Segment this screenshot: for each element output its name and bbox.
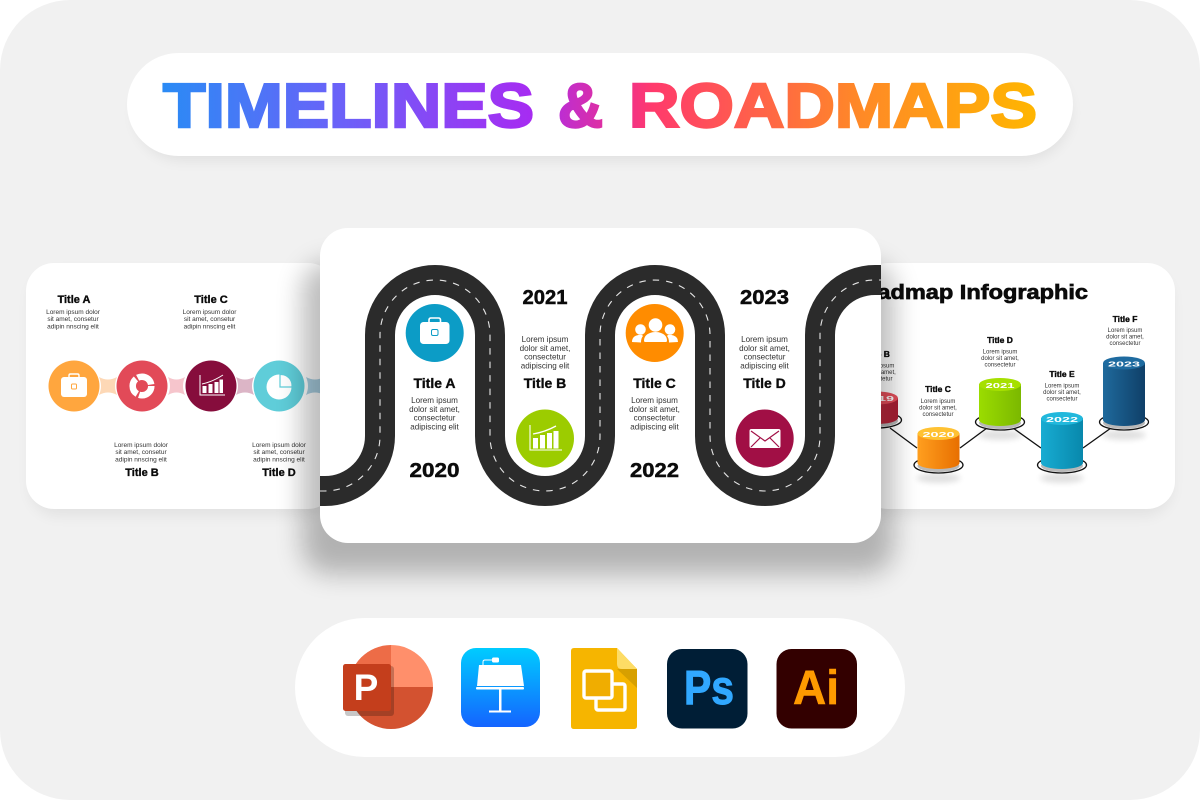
icon: growth chart circle <box>516 410 574 468</box>
label: Title D: Title D <box>987 335 1013 345</box>
cylinder 2019: 2019 <box>862 394 894 403</box>
text: Title A: Lorem ipsum dolor <box>46 309 101 316</box>
text: Title C: dolor sit amet, <box>629 405 680 414</box>
text: Title B: dolor sit amet, <box>520 344 570 353</box>
label: Title E: Lorem ipsum <box>1045 384 1079 390</box>
icon: PowerPoint: P <box>354 667 378 708</box>
year 2022: 2022 <box>630 459 679 482</box>
cylinder 2020: 2020 <box>922 430 954 439</box>
text: Title A: dolor sit amet, <box>409 405 460 414</box>
step D: pie <box>254 360 304 412</box>
icon: Keynote <box>461 648 540 727</box>
card shadow <box>302 262 894 574</box>
label: Title E: dolor sit amet, <box>1043 390 1081 396</box>
text: Title B: sit amet, consetur <box>115 449 167 456</box>
label: Title C: dolor sit amet, <box>919 406 957 412</box>
title banner <box>127 53 1073 160</box>
text: Title C <box>629 375 680 432</box>
text: Title C: Title C <box>194 294 228 306</box>
text: Title C: sit amet, consetur <box>184 316 236 323</box>
cylinder 2019 <box>852 392 902 428</box>
year 2020: 2020 <box>410 459 460 482</box>
label: Title D: consectetur <box>984 362 1016 368</box>
text: Title C: Lorem ipsum dolor <box>183 309 237 316</box>
cylinder 2022: 2022 <box>1046 415 1078 424</box>
text: Title B: Title B <box>524 375 566 391</box>
label: Title F: Lorem ipsum <box>1108 328 1142 334</box>
cylinder 2021 <box>976 378 1024 440</box>
title: & <box>558 72 603 141</box>
text: Title D <box>252 442 307 479</box>
connector lines <box>890 428 1111 448</box>
text: Title A <box>46 294 101 330</box>
road <box>320 280 881 491</box>
text: Title D: adipin nnscing elit <box>253 456 305 464</box>
label: Title B: Title B <box>864 349 890 359</box>
title <box>163 72 1037 141</box>
label: Title B: consectetur <box>861 376 893 382</box>
text: Title D: adipiscing elit <box>740 362 790 370</box>
label: Title B: dolor sit amet, <box>858 370 896 376</box>
text: Title A: Title A <box>57 294 91 306</box>
text: Title A: Lorem ipsum <box>411 396 458 405</box>
cylinder 2020 <box>914 427 963 483</box>
label: Title D: Lorem ipsum <box>983 350 1017 356</box>
text: Title B: Lorem ipsum <box>522 335 569 344</box>
text: Title A: adipin nnscing elit <box>47 324 99 330</box>
label: Title F: consectetur <box>1109 341 1141 347</box>
text: Title D: consectetur <box>744 352 786 362</box>
text: Title A: adipiscing elit <box>410 422 460 432</box>
panel: right cylinder roadmap slide <box>846 263 1175 516</box>
text: Title D: Lorem ipsum dolor <box>252 442 307 449</box>
icon: Illustrator: Ai <box>793 662 839 715</box>
text: Title A: consectetur <box>414 414 456 422</box>
panel: software icons <box>295 618 905 757</box>
text: Title B: consectetur <box>524 352 566 362</box>
text: Title B: Title B <box>125 467 159 479</box>
text: Title D: Title D <box>262 467 296 479</box>
slide heading: Roadmap Infographic <box>846 282 1088 304</box>
cylinder 2023 <box>1100 356 1148 440</box>
label: Title B <box>858 349 896 382</box>
step C: chart <box>186 360 236 412</box>
text: Title A <box>409 375 460 432</box>
label: Title E: consectetur <box>1046 396 1078 402</box>
panel: central winding road slide <box>320 228 881 543</box>
title: ROADMAPS <box>629 72 1037 141</box>
text: Title B <box>114 442 169 479</box>
icon: briefcase circle <box>406 304 464 362</box>
text: Title C: Lorem ipsum <box>631 396 678 405</box>
panel: left timeline slide <box>26 263 336 516</box>
cylinder 2021: 2021 <box>986 381 1014 390</box>
text: Title D <box>739 335 790 391</box>
label: Title F <box>1106 314 1144 347</box>
connectors <box>99 377 324 395</box>
text: Title B: Lorem ipsum dolor <box>114 442 169 449</box>
label: Title D: dolor sit amet, <box>981 356 1019 362</box>
text: Title C: adipiscing elit <box>630 422 680 432</box>
icon: Photoshop: Ps <box>684 662 734 715</box>
label: Title D <box>981 335 1019 368</box>
text: Title A: sit amet, consetur <box>47 316 99 323</box>
label: Title B: Lorem ipsum <box>860 364 894 370</box>
cylinder 2023: 2023 <box>1108 360 1140 368</box>
label: Title C: Lorem ipsum <box>921 399 955 405</box>
label: Title C: Title C <box>925 384 951 394</box>
icon: PowerPoint <box>343 645 433 729</box>
text: Title C: Title C <box>633 375 676 391</box>
text: Title C: consectetur <box>634 414 676 422</box>
label: Title E: Title E <box>1049 369 1075 379</box>
text: Title C <box>183 294 237 330</box>
label: Title F: dolor sit amet, <box>1106 334 1144 340</box>
label: Title C: consectetur <box>922 412 954 418</box>
year 2021: 2021 <box>522 286 568 309</box>
icon: envelope circle <box>736 410 794 468</box>
text: Title B <box>520 335 570 391</box>
label: Title F: Title F <box>1113 314 1137 324</box>
label: Title C <box>919 384 957 418</box>
icon: Illustrator <box>776 649 857 728</box>
cylinder 2022 <box>1038 412 1086 483</box>
step A: briefcase <box>48 360 100 412</box>
icon: people circle <box>626 304 684 362</box>
text: Title C: adipin nnscing elit <box>184 324 236 330</box>
text: Title D: sit amet, consetur <box>253 449 305 456</box>
text: Title B: adipiscing elit <box>521 362 570 370</box>
text: Title A: Title A <box>413 375 456 391</box>
icon: Google Slides <box>571 648 637 729</box>
text: Title D: Title D <box>743 375 786 391</box>
text: Title B: adipin nnscing elit <box>115 456 167 464</box>
text: Title D: dolor sit amet, <box>739 344 790 353</box>
year 2023: 2023 <box>740 286 789 309</box>
title: TIMELINES <box>163 72 534 141</box>
icon: Photoshop <box>667 649 748 728</box>
step B: cycle <box>116 360 168 412</box>
label: Title E <box>1043 369 1081 402</box>
text: Title D: Lorem ipsum <box>741 335 788 344</box>
